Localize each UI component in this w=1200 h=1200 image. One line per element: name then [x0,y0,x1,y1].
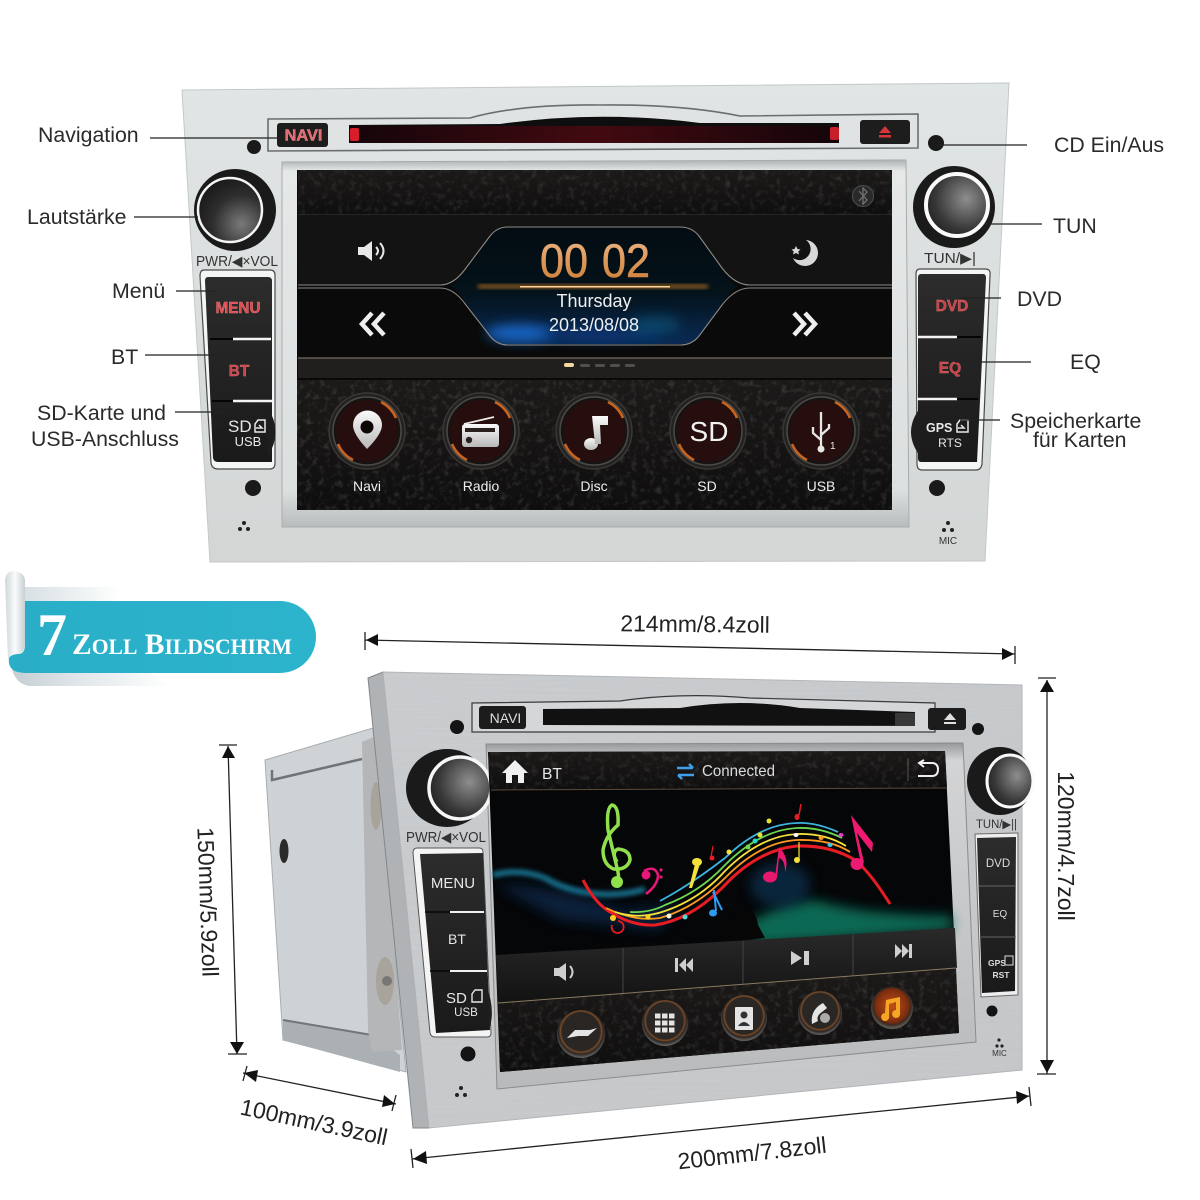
icon: usb: USB [807,478,835,494]
connected label: Connected [702,763,775,780]
mic right: MIC [992,1049,1007,1058]
pwr vol label: PWR/◀×VOL [196,254,278,270]
callout: speicherkarte: Speicherkarte [1010,409,1141,433]
right button strip: RTS [938,436,962,450]
side edge [368,672,429,1128]
callout: menue: Menü [112,279,165,303]
bottom radio unit [368,672,1033,1128]
clock panel [450,228,738,344]
navi button: NAVI [284,128,322,144]
dimension: 150mm depth height: 150mm/5.9zoll [192,827,224,977]
bezel [182,83,1009,562]
hill silhouette [722,908,765,942]
icon: previous [675,958,693,972]
band glow lines [298,227,892,345]
callout: sd karte: SD-Karte und [37,401,166,425]
right button strip [975,833,1018,997]
navi button [277,123,328,147]
callout: navigation: Navigation [38,123,139,147]
callout: menue [112,279,216,303]
left button strip [413,848,492,1037]
volume icon [358,241,384,261]
left button strip: SD [228,417,252,436]
mic right [939,521,957,547]
controls row [496,928,957,1003]
callout: cd ein aus: CD Ein/Aus [1054,133,1164,157]
mic right: MIC [939,536,957,547]
dimension: 150mm depth height [192,745,247,1054]
left button strip: MENU [216,300,260,317]
callout: bt [111,345,222,369]
right button strip: EQ [993,909,1007,920]
callout: dvd: DVD [1017,287,1062,311]
dimension: 200mm bottom width: 200mm/7.8zoll [676,1132,828,1174]
icon: sd [670,393,746,494]
callout: lautstaerke: Lautstärke [27,205,126,229]
bass clef [642,868,663,894]
rewind icon [362,313,384,335]
tune knob [913,166,995,248]
right button strip: DVD [936,298,968,315]
right button strip [911,269,990,470]
left button strip: SD [446,990,467,1007]
left button strip: MENU [431,875,475,892]
mic left [455,1086,467,1097]
icon: home [502,760,528,783]
tun label: TUN/▶| [924,251,976,267]
icon: usb: 1 [830,441,836,452]
notes [610,804,873,933]
dimension: 100mm depth: 100mm/3.9zoll [238,1094,390,1150]
icon: radio [443,393,519,494]
callout: bt: BT [111,345,138,369]
bezel [383,672,1022,1128]
dimension: 214mm top width: 214mm/8.4zoll [620,610,770,638]
volume knob [194,169,276,251]
night mode icon [792,240,818,266]
mic right [992,1038,1007,1058]
top bar [488,751,947,790]
callout: tun: TUN [1053,214,1097,238]
dimension: 120mm height [1037,678,1079,1074]
right button strip: EQ [939,360,961,377]
lower touch band [298,288,892,358]
right button strip: GPS [988,958,1006,968]
icon: radio: Radio [463,478,499,494]
icon: play pause [791,951,809,965]
upper touch band [298,215,892,285]
callout: speicherkarte [960,409,1141,452]
left button strip [200,270,276,469]
clock time [540,234,650,287]
disc slot bracket [472,696,935,732]
navi button: NAVI [490,710,521,726]
banner number: 7 [37,602,67,668]
bluetooth icon [852,186,874,206]
dimension: 214mm top width [365,610,1015,664]
icon: phone log [798,991,842,1035]
bt label: BT [542,766,562,783]
page strip [298,358,892,378]
left button strip: BT [448,931,466,947]
clock time: 02 [602,234,650,287]
nebula blue [493,872,645,894]
screen frame [282,160,909,527]
dimension: 100mm depth [238,1066,396,1150]
right button strip: DVD [986,858,1010,870]
day: Thursday [556,291,632,311]
disc slot bracket [268,105,918,151]
screen frame [486,743,976,1089]
pwr vol label: PWR/◀×VOL [406,830,486,846]
icon: sd: SD [690,416,728,447]
dimension: 120mm height: 120mm/4.7zoll [1053,771,1079,921]
eject button [860,120,910,144]
icon: next [895,944,912,958]
callout: speicherkarte: für Karten [1033,428,1127,452]
music scene [493,804,952,945]
icon: navi [329,393,405,494]
icon: disc: Disc [580,478,608,494]
forward icon [794,313,815,335]
leather tray [498,968,959,1072]
banner title: ZOLL BILDSCHIRM [72,628,292,661]
nebula haze [495,885,680,930]
icon: volume [554,963,572,981]
icon: connected [677,764,694,779]
tune knob [967,747,1033,815]
brushed metal texture [383,672,1022,1128]
callout: tun [985,214,1097,238]
icon: back [918,760,938,776]
callout: eq: EQ [1070,350,1101,374]
nebula teal glow [750,863,810,907]
navi button [479,706,526,729]
screw holes [245,135,945,496]
treble clef [603,805,630,888]
callout: sd karte: USB-Anschluss [31,427,179,451]
banner: 7 zoll bildschirm [5,571,316,686]
nebula green [745,900,952,945]
icon: usb [783,393,859,494]
disc slot [543,703,915,726]
volume knob [406,749,491,827]
left button strip: USB [454,1007,478,1019]
clock time: 00 [540,234,588,287]
icon: music [871,987,913,1029]
leather app tray [297,380,892,510]
callout: sd karte [31,401,226,451]
callout: dvd [960,287,1062,311]
icon: contacts [721,995,767,1041]
screw holes [450,720,998,1062]
left button strip: USB [235,434,261,449]
right button strip: RST [992,970,1010,980]
right button strip: GPS [926,421,952,435]
disc slot [349,117,839,143]
chassis side view [265,728,406,1072]
icon: disc [556,393,632,494]
tun label: TUN/▶|| [976,819,1017,831]
eject button [928,708,966,730]
screen [297,170,892,510]
top radio unit [182,83,1009,562]
screen [488,751,959,1072]
left button strip: BT [229,363,250,380]
icon: apps [642,1000,688,1046]
icon: sd: SD [697,478,717,494]
colored staff [583,823,890,925]
date: 2013/08/08 [549,315,639,335]
icon: navi: Navi [353,478,381,494]
dimension: 200mm bottom width [411,1087,1031,1174]
mic left [238,521,250,531]
icon: settings [557,1010,605,1058]
